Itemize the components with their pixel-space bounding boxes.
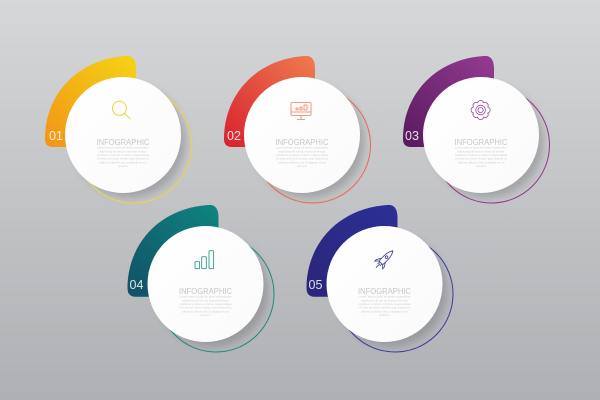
outline ring [337, 236, 453, 352]
wing: teal tab [128, 205, 218, 297]
body text: ullamco laboris nisi ut aliquip ex ea [182, 309, 229, 313]
body text: incididunt ut labore et dolore magna aliqua [180, 302, 232, 306]
outline ring [434, 87, 550, 203]
body text: incididunt ut labore et dolore magna aliqua [358, 302, 411, 306]
wing: red tab [224, 56, 315, 147]
body text: Ut enim ad minim veniam quis nostrud ex [358, 306, 411, 310]
body text: adipiscing elit sed do eiusmod tempor [278, 149, 326, 153]
body text: adipiscing elit sed do eiusmod tempor [361, 298, 408, 302]
white circle [148, 226, 264, 342]
body text [97, 146, 149, 168]
body text: Lorem ipsum dolor sit amet consectetur [455, 146, 507, 150]
body text: Ut enim ad minim veniam quis nostrud ex [180, 306, 232, 310]
icon: rocket [372, 247, 397, 272]
heading: INFOGRAPHIC [276, 137, 328, 147]
heading: INFOGRAPHIC [179, 286, 232, 296]
body text [358, 295, 411, 317]
body text: Lorem ipsum dolor sit amet consectetur [276, 146, 328, 150]
body text: ullamco laboris nisi ut aliquip ex ea [279, 160, 326, 164]
body text: ullamco laboris nisi ut aliquip ex ea [458, 160, 505, 164]
icon: magnifier [112, 101, 130, 119]
wing: navy tab [306, 205, 398, 297]
body text: incididunt ut labore et dolore magna aliqua [276, 153, 328, 157]
body text: Lorem ipsum dolor sit amet consectetur [180, 295, 232, 299]
body text: ullamco laboris nisi ut aliquip ex ea [361, 309, 408, 313]
white circle [326, 226, 442, 342]
body text: ipsum [200, 313, 211, 317]
body text: ipsum [118, 164, 129, 168]
number 02: 02 [227, 129, 241, 143]
body text: ipsum [297, 164, 308, 168]
panel: step 05 [306, 205, 453, 352]
body text: Lorem ipsum dolor sit amet consectetur [358, 295, 410, 299]
icon: gear [471, 100, 490, 120]
body text: incididunt ut labore et dolore magna aliqua [455, 153, 507, 157]
icon: bar chart [195, 251, 214, 269]
wing: yellow-orange tab [45, 56, 136, 147]
body text: adipiscing elit sed do eiusmod tempor [458, 149, 504, 153]
body text: Ut enim ad minim veniam quis nostrud ex [455, 157, 507, 161]
body text [276, 146, 328, 168]
number 04: 04 [130, 278, 143, 292]
heading: INFOGRAPHIC [358, 286, 411, 296]
body text: adipiscing elit sed do eiusmod tempor [182, 298, 229, 302]
number 03: 03 [405, 129, 419, 143]
heading: INFOGRAPHIC [96, 137, 150, 147]
icon: monitor chart [291, 102, 311, 120]
body text: ipsum [476, 164, 487, 168]
body text: Ut enim ad minim veniam quis nostrud ex [97, 157, 149, 161]
number 05: 05 [308, 278, 322, 292]
outline ring [76, 87, 192, 203]
number 01: 01 [49, 129, 63, 143]
body text: ullamco laboris nisi ut aliquip ex ea [100, 160, 147, 164]
panel: step 02 [224, 56, 370, 203]
panel: step 04 [128, 205, 274, 352]
body text [455, 146, 507, 168]
outline ring [254, 87, 370, 203]
panel: step 01 [45, 56, 192, 203]
body text: Ut enim ad minim veniam quis nostrud ex [276, 157, 328, 161]
wing: purple tab [403, 56, 494, 147]
panel: step 03 [403, 56, 550, 203]
heading: INFOGRAPHIC [454, 137, 508, 147]
white circle [244, 77, 360, 193]
white circle [423, 77, 539, 193]
body text: Lorem ipsum dolor sit amet consectetur [97, 146, 149, 150]
outline ring [158, 236, 274, 352]
body text: ipsum [380, 313, 390, 317]
body text [180, 295, 232, 317]
body text: incididunt ut labore et dolore magna aliqua [97, 153, 149, 157]
body text: adipiscing elit sed do eiusmod tempor [100, 149, 146, 153]
white circle [65, 77, 181, 193]
